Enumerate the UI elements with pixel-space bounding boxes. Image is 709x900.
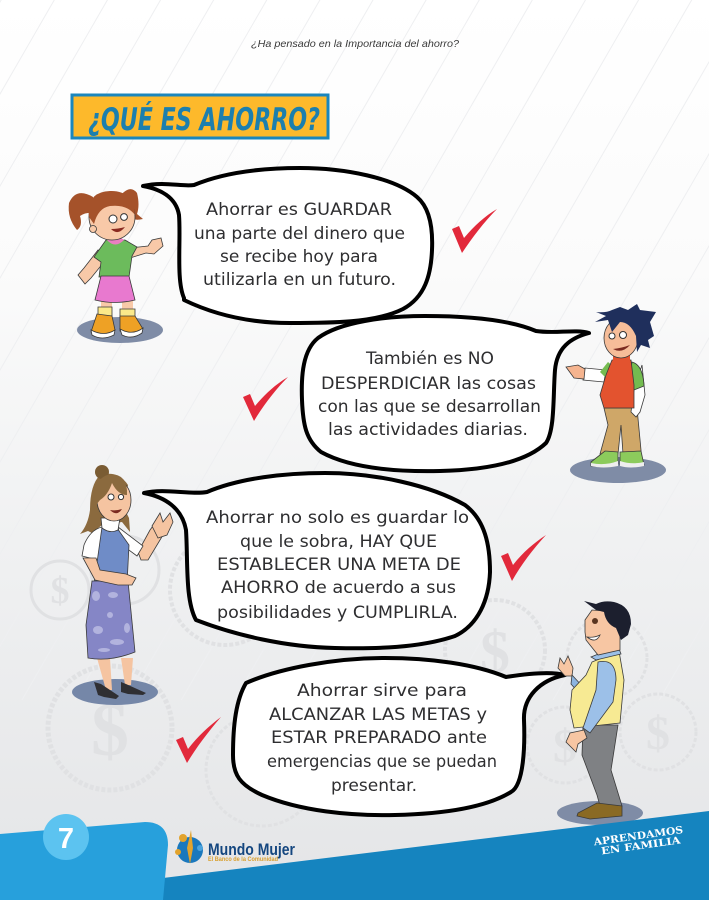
ponytails (69, 193, 94, 230)
speech bubble 1: utilizarla en un futuro. (203, 270, 396, 290)
background coins: $ (91, 688, 129, 772)
brown shoes (577, 803, 622, 819)
speech bubble 3: ESTABLECER UNA META DE (217, 555, 461, 575)
head (585, 610, 620, 655)
yellow vest (570, 651, 624, 728)
background coins: $ (553, 720, 577, 773)
title banner (72, 95, 328, 138)
character: woman (72, 465, 173, 705)
speech bubble 1: se recibe hoy para (220, 247, 378, 267)
shadow (77, 317, 163, 343)
face (108, 494, 114, 500)
head (604, 318, 638, 358)
raised hand and forearm (558, 656, 573, 676)
face (109, 215, 117, 223)
footer: dark blue band (163, 811, 709, 900)
background coins: $ (50, 570, 70, 612)
footer slogan (592, 825, 685, 858)
blue apron (94, 527, 129, 584)
logo: Mundo Mujer: Mundo Mujer (208, 840, 295, 859)
skirt (95, 276, 135, 302)
shoes (591, 451, 644, 467)
speech bubble 2: DESPERDICIAR las cosas (321, 374, 536, 394)
check mark 1 (452, 209, 497, 253)
shadow (570, 457, 666, 483)
arm across waist (83, 558, 136, 585)
legs (97, 658, 133, 690)
character: man (557, 601, 643, 825)
speech bubble 2: También es NO (365, 349, 494, 369)
white blouse (82, 527, 143, 560)
check mark 2 (243, 377, 288, 421)
speech bubble 3 (144, 473, 490, 648)
head (97, 479, 131, 521)
speech bubble 4 (233, 658, 565, 815)
arms (78, 250, 104, 284)
background coins: $ (646, 707, 670, 760)
speech bubble 4: emergencias que se puedan (267, 752, 497, 772)
hair (595, 304, 656, 352)
head (89, 194, 135, 240)
title banner: ¿QUÉ ES AHORRO? (88, 102, 320, 138)
globe icon (175, 830, 203, 864)
check mark 3 (501, 535, 546, 581)
socks and shoes (98, 307, 135, 318)
shadow (72, 679, 158, 705)
page number: 7 (58, 823, 74, 855)
background coins: $ (480, 619, 510, 685)
check mark 4 (176, 717, 221, 763)
background coins (31, 535, 696, 826)
speech bubble 4: ALCANZAR LAS METAS y (269, 705, 487, 725)
page number (43, 814, 89, 860)
hair (584, 601, 631, 640)
speech bubble 4: Ahorrar sirve para (297, 681, 467, 701)
shirt (94, 240, 137, 277)
speech bubble 3: posibilidades y CUMPLIRLA. (217, 603, 458, 623)
collar (591, 646, 621, 660)
speech bubble 2: con las que se desarrollan (318, 397, 541, 417)
gray pants (582, 725, 622, 806)
logo: Mundo Mujer: El Banco de la Comunidad (208, 857, 278, 863)
footer: light blue tab (0, 822, 168, 900)
speech bubble 4: presentar. (331, 776, 417, 796)
speech bubble 3: AHORRO de acuerdo a sus (221, 578, 456, 598)
speech bubble 1: una parte del dinero que (194, 224, 405, 244)
purple skirt (86, 581, 135, 659)
logo: Mundo Mujer (175, 830, 295, 864)
arm and hand pointing left (583, 368, 606, 382)
lower hand (566, 730, 587, 752)
speech bubble 4: ESTAR PREPARADO ante (271, 728, 487, 748)
footer slogan: APRENDAMOS (592, 825, 684, 849)
blue sleeve (583, 661, 616, 733)
character: boy (566, 304, 666, 483)
speech bubble 3: que le sobra, HAY QUE (240, 532, 437, 552)
face (592, 618, 598, 624)
speech bubble 1: Ahorrar es GUARDAR (206, 200, 392, 220)
raised arm and hand (138, 522, 166, 560)
red jacket (600, 360, 634, 408)
face (620, 332, 626, 338)
speech bubble 3: Ahorrar no solo es guardar lo (206, 508, 469, 528)
legs (101, 300, 133, 312)
character: girl (69, 189, 163, 343)
pants (600, 408, 641, 454)
speech bubble 2 (302, 316, 589, 471)
green sleeves (600, 362, 615, 380)
shoes (94, 682, 146, 699)
running header: ¿Ha pensado en la Importancia del ahorro? (251, 38, 459, 50)
collar (101, 518, 120, 532)
footer slogan: EN FAMILIA (601, 835, 682, 857)
hair back (80, 474, 130, 534)
speech bubble 1 (143, 168, 432, 323)
shadow (557, 801, 643, 825)
speech bubble 2: las actividades diarias. (328, 420, 528, 440)
